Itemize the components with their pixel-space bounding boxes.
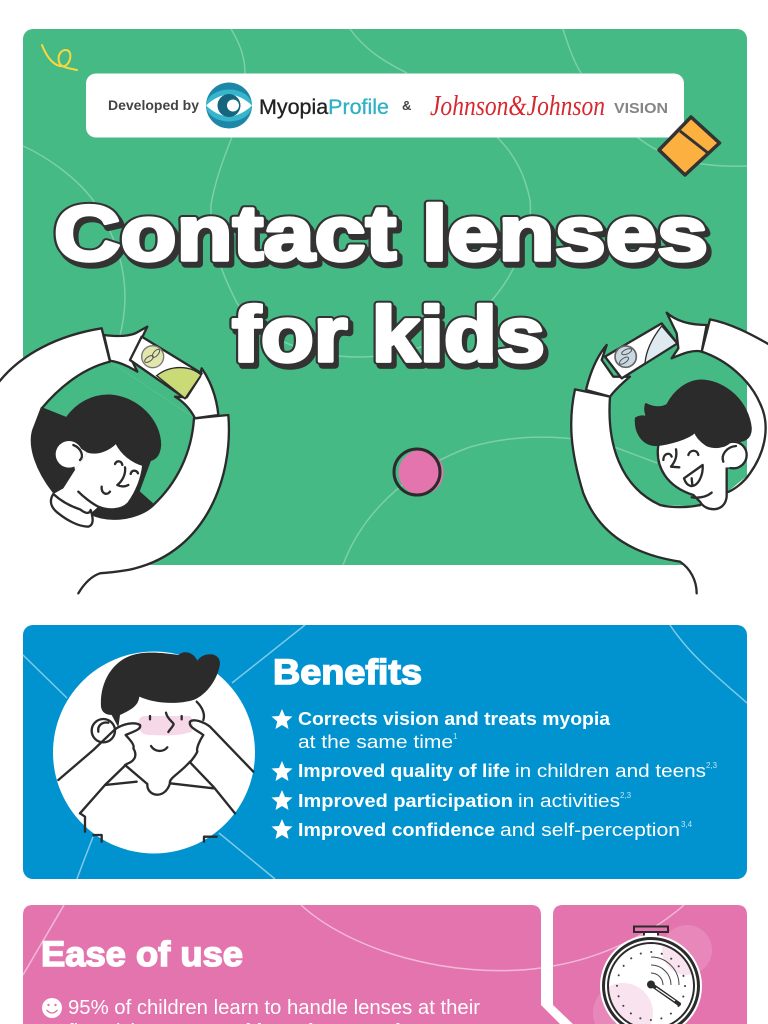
title: for kids: [232, 290, 545, 378]
title: for kids: [232, 290, 545, 378]
benefit: participation: in activities: [518, 791, 620, 811]
face and hands: [58, 702, 253, 842]
icon: stopwatch: [593, 925, 712, 1024]
icon: pink circle: [394, 449, 444, 495]
text: johnson and johnson: Johnson&Johnson: [430, 91, 605, 122]
icon: star: [272, 761, 292, 781]
heading: ease of use: Ease of use: [41, 935, 243, 974]
benefit: participation: [298, 791, 632, 811]
title: for kids: [235, 294, 548, 382]
benefit: quality of life: [298, 761, 718, 781]
icon: orange diamond: [659, 117, 720, 175]
icon: myopia profile eye: [206, 82, 252, 128]
benefit: corrects vision: at the same time: [298, 732, 453, 752]
panel: benefits: [23, 625, 747, 879]
illustration: left child with green lens case: [0, 327, 229, 593]
benefit: quality of life: in children and teens: [515, 761, 706, 781]
head: [32, 396, 160, 527]
panel: green hero: [23, 29, 747, 565]
heading: benefits: Benefits: [273, 653, 422, 692]
hand and lens case: [586, 313, 707, 397]
hand and lens case: [104, 327, 218, 418]
benefit: confidence: [298, 820, 693, 840]
text: developed by: Developed by: [108, 98, 200, 113]
icon: star: [272, 819, 292, 839]
text: myopia profile: MyopiaProfile: [259, 96, 389, 119]
text: vision: VISION: [614, 101, 668, 117]
panel: stopwatch: [553, 905, 747, 1024]
benefit: confidence: and self-perception: [500, 820, 680, 840]
head: [636, 381, 751, 509]
text: ampersand: &: [402, 98, 411, 113]
benefit: participation: Improved participation: [298, 791, 513, 811]
benefit: corrects vision: 1: [453, 732, 458, 741]
text: ease of use point: 95% of children learn to handle lenses at their: [68, 997, 480, 1019]
title: Contact lenses: [57, 193, 711, 281]
benefit: quality of life: 2,3: [706, 761, 718, 770]
illustration: right child with blue lens case: [571, 313, 768, 593]
panel: ease of use: [23, 905, 562, 1024]
blush: [138, 716, 193, 735]
icon: star: [272, 709, 292, 729]
list: benefits: [272, 709, 718, 840]
illustration: child inserting a lens: [53, 652, 255, 854]
benefit: confidence: Improved confidence: [298, 820, 495, 840]
benefit: confidence: 3,4: [681, 820, 693, 829]
benefit: participation: 2,3: [620, 791, 632, 800]
title: [54, 189, 711, 382]
title: Contact lenses: [54, 189, 708, 277]
benefit: corrects vision: [298, 709, 611, 752]
title: Contact lenses: [54, 189, 708, 277]
benefit: quality of life: Improved quality of life: [298, 761, 510, 781]
icon: yellow squiggle: [42, 45, 77, 70]
icon: smiley: [42, 998, 62, 1018]
icon: star: [272, 790, 292, 810]
benefit: corrects vision: Corrects vision and treats myopia: [298, 709, 611, 729]
panel: developer logos: [86, 74, 684, 138]
hair: [101, 652, 220, 727]
